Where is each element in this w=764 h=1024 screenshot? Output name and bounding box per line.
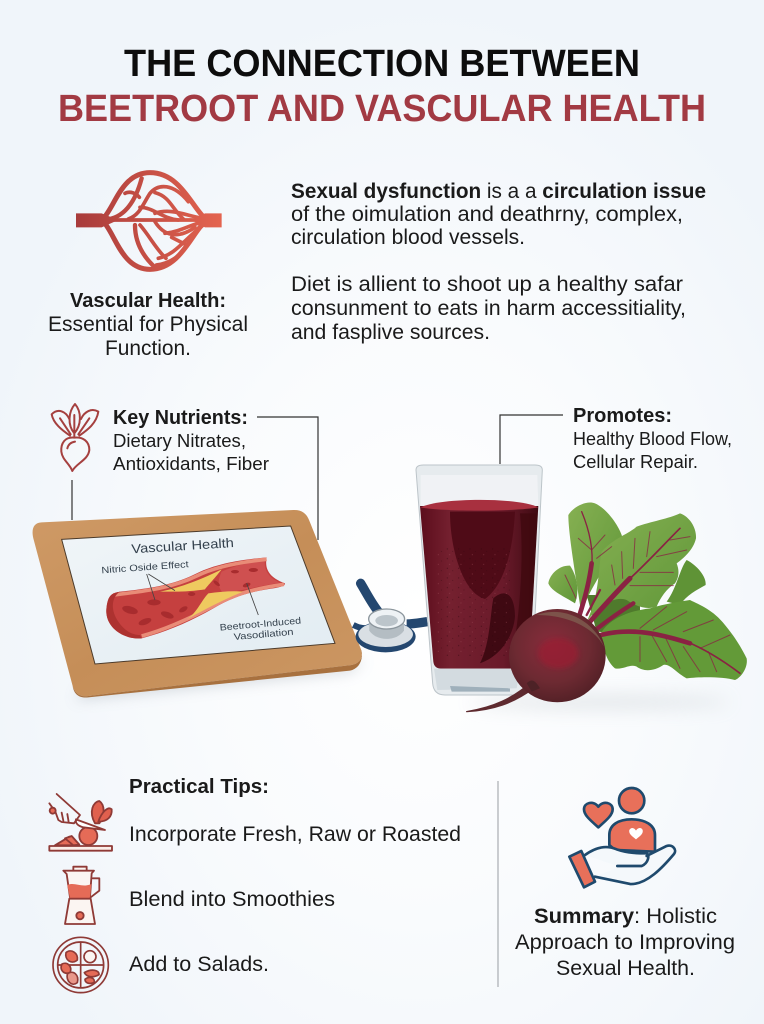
divider (497, 781, 499, 987)
tablet screen labels: Beetroot-Induced (219, 616, 302, 633)
text: key nutrients (113, 407, 269, 474)
icon: hand holding person and heart (569, 788, 675, 887)
text: summary: Summary: Holistic (534, 905, 717, 928)
text: intro paragraph: Sexual dysfunction is a a circulation issue (291, 179, 706, 203)
text: promotes: Healthy Blood Flow, (573, 428, 732, 449)
text: promotes: Cellular Repair. (573, 451, 698, 472)
tablet screen (62, 526, 335, 664)
text: practical tips heading: Practical Tips: (129, 776, 269, 798)
icon: blood vessel network (76, 173, 222, 269)
photo: beet juice glass, beetroot and leaves (416, 465, 747, 712)
text: tip one: Incorporate Fresh, Raw or Roasted (129, 823, 461, 846)
beetroot bulb (467, 609, 606, 712)
text: key nutrients: Dietary Nitrates, (113, 430, 246, 451)
text: promotes (573, 405, 732, 472)
text: summary (515, 905, 735, 980)
icon: beetroot outline (52, 404, 98, 471)
beet leaves (548, 502, 747, 680)
connector: promotes to glass (500, 415, 563, 464)
artery (106, 557, 285, 638)
text: intro paragraph: of the oimulation and deathrny, complex, (291, 202, 683, 226)
text: vascular health caption: Vascular Health: (70, 290, 226, 312)
tablet wooden frame (33, 510, 362, 696)
text: key nutrients: Key Nutrients: (113, 407, 248, 429)
icon: blender (63, 867, 99, 924)
text: summary: Approach to Improving (515, 931, 735, 954)
tablet with artery diagram (33, 510, 365, 700)
text: intro paragraph: consunment to eats in harm accessitiality, (291, 296, 686, 320)
text: tip two: Blend into Smoothies (129, 888, 335, 911)
text: tip three: Add to Salads. (129, 953, 269, 976)
tablet screen labels: Vasodilation (233, 627, 294, 642)
tablet screen labels (101, 535, 302, 642)
text: summary: Sexual Health. (556, 957, 695, 980)
text: intro paragraph: circulation blood vessels. (291, 225, 525, 249)
stethoscope (353, 583, 427, 652)
title: THE CONNECTION BETWEEN (124, 43, 640, 85)
text: intro paragraph: Diet is allient to shoot up a healthy safar (291, 272, 683, 296)
text: promotes: Promotes: (573, 405, 672, 427)
text: key nutrients: Antioxidants, Fiber (113, 453, 269, 474)
tablet screen labels: Vascular Health (131, 535, 234, 556)
icon: salad plate (53, 937, 108, 993)
leaf stems and veins (565, 512, 740, 673)
title: BEETROOT AND VASCULAR HEALTH (58, 88, 706, 130)
title (58, 43, 706, 130)
glass of beet juice (416, 465, 542, 695)
text: vascular health caption: Function. (105, 337, 191, 360)
tablet screen labels: Nitric Oside Effect (101, 559, 189, 575)
connector: key nutrients to tablet (72, 417, 318, 540)
text: vascular health caption: Essential for Physical (48, 313, 248, 336)
text: intro paragraph (291, 179, 706, 344)
text: vascular health caption (48, 290, 248, 360)
text: intro paragraph: and fasplive sources. (291, 320, 490, 344)
icon: chopping beetroot (49, 794, 112, 851)
